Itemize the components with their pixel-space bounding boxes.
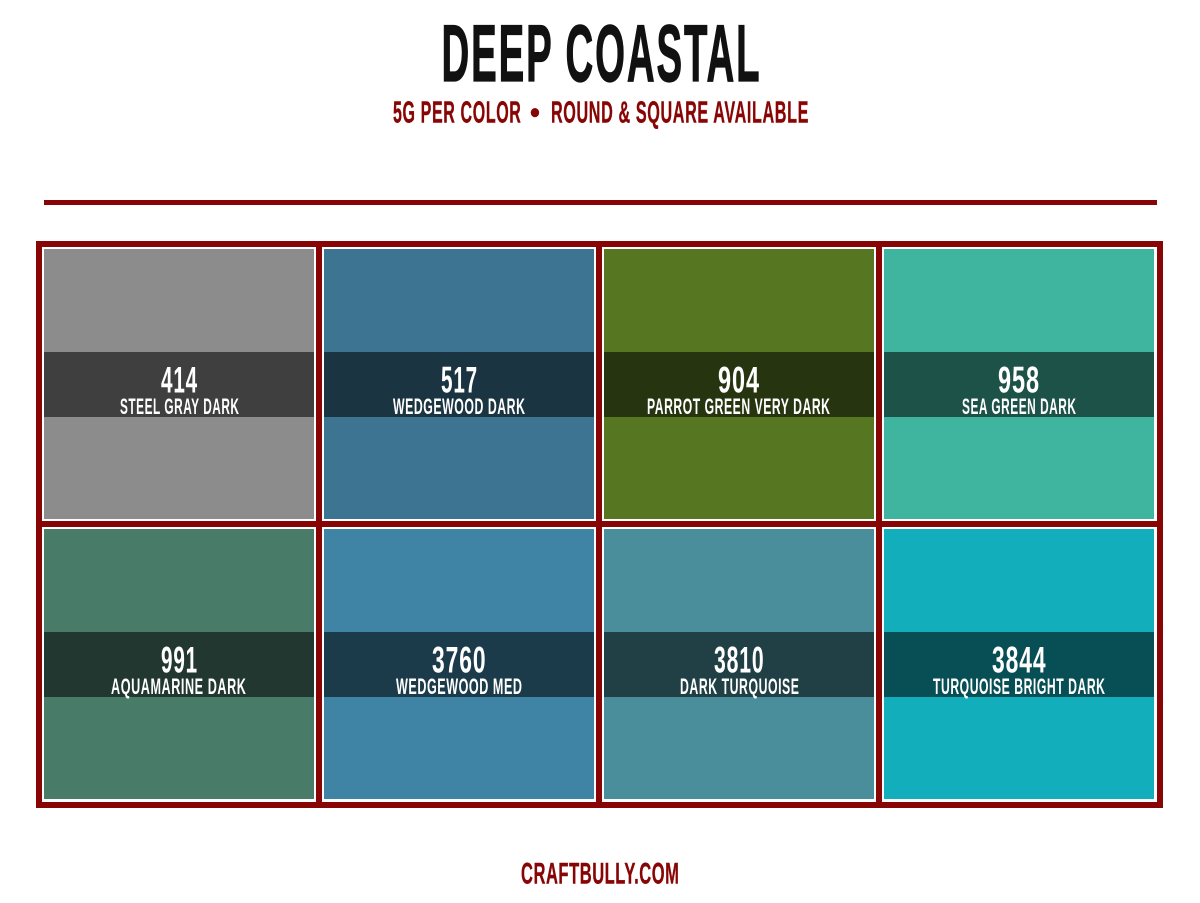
- infographic canvas: DEEP COASTAL: [442, 9, 762, 99]
- swatch: 3760 wedgewood med: 3760: [432, 640, 486, 680]
- swatch: 904 parrot green very dark: PARROT GREEN VERY DARK: [647, 394, 830, 419]
- subtitle: •: [530, 94, 541, 130]
- swatch: 958 sea green dark: SEA GREEN DARK: [962, 394, 1076, 419]
- subtitle: [393, 94, 809, 130]
- swatch: 414 steel gray dark: 414: [161, 360, 198, 400]
- swatch: 958 sea green dark: [882, 247, 1157, 521]
- swatch: 517 wedgewood dark: WEDGEWOOD DARK: [393, 394, 526, 419]
- footer: CRAFTBULLY.COM: [521, 858, 680, 890]
- divider rule: [44, 200, 1157, 205]
- swatch: 904 parrot green very dark: 904: [718, 360, 760, 400]
- swatch: 991 aquamarine dark: 991: [161, 640, 198, 680]
- swatch: 3844 turquoise bright dark: [882, 527, 1157, 802]
- swatch: 3810 dark turquoise: [602, 527, 876, 802]
- grid frame: [36, 241, 1163, 808]
- swatch: 991 aquamarine dark: AQUAMARINE DARK: [111, 674, 246, 699]
- swatch: 414 steel gray dark: STEEL GRAY DARK: [120, 394, 240, 419]
- swatch: 517 wedgewood dark: [322, 247, 596, 521]
- swatch: 414 steel gray dark: [42, 247, 316, 521]
- swatch: 3760 wedgewood med: WEDGEWOOD MED: [396, 674, 522, 699]
- swatch: 904 parrot green very dark: [602, 247, 876, 521]
- swatch: 3844 turquoise bright dark: 3844: [992, 640, 1046, 680]
- swatch: 991 aquamarine dark: [42, 527, 316, 802]
- swatch: 958 sea green dark: 958: [998, 360, 1040, 400]
- swatch: 3760 wedgewood med: [322, 527, 596, 802]
- subtitle: 5G PER COLOR: [393, 94, 522, 130]
- subtitle: ROUND & SQUARE AVAILABLE: [551, 94, 809, 130]
- swatch grid: [36, 241, 1163, 808]
- swatch: 517 wedgewood dark: 517: [441, 360, 478, 400]
- swatch: 3810 dark turquoise: DARK TURQUOISE: [680, 674, 800, 699]
- swatch: 3810 dark turquoise: 3810: [714, 640, 764, 680]
